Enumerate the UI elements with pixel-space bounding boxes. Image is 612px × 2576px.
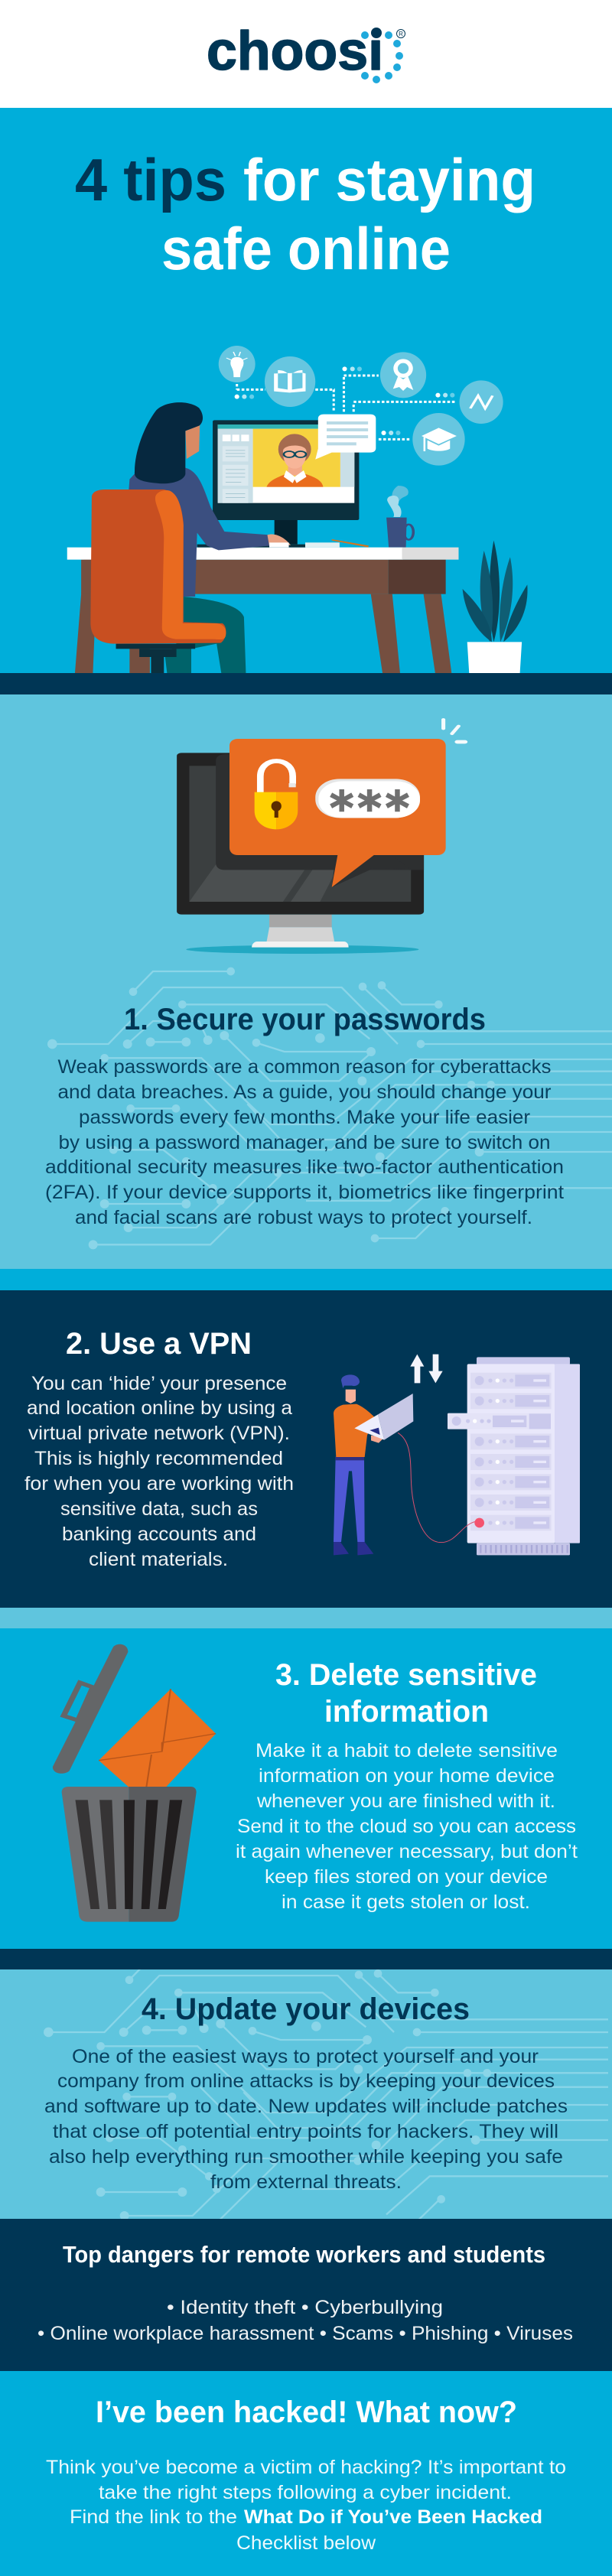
on-screen person xyxy=(266,434,323,487)
panel: hero xyxy=(0,108,612,673)
chair xyxy=(90,490,226,673)
desk xyxy=(67,548,458,673)
body text xyxy=(24,1373,294,1570)
password asterisks: *** xyxy=(330,782,413,835)
body text: that close off potential entry points for hackers. They will xyxy=(53,2121,558,2142)
divider band xyxy=(0,1949,612,1969)
body text: What Do if You’ve Been Hacked xyxy=(244,2506,542,2528)
body text: and software up to date. New updates will include patches xyxy=(44,2096,568,2117)
title: safe online xyxy=(161,215,451,282)
password field xyxy=(315,779,420,818)
body text: from external threats. xyxy=(210,2171,402,2193)
body text: and location online by using a xyxy=(27,1397,292,1419)
body text: This is highly recommended xyxy=(34,1448,283,1469)
icon bubbles with connecting dots xyxy=(219,346,503,466)
body text: sensitive data, such as xyxy=(60,1498,258,1520)
heading: 1. Secure your passwords xyxy=(124,1003,486,1036)
body text: also help everything run smoother while keeping you safe xyxy=(49,2146,563,2168)
cable and plug xyxy=(398,1433,484,1543)
person with laptop xyxy=(334,1374,413,1555)
body text: Think you’ve become a victim of hacking? It’s important to xyxy=(46,2457,566,2478)
icon: line graph xyxy=(470,395,493,408)
list of dangers: • Online workplace harassment • Scams • Phishing • Viruses xyxy=(37,2323,573,2344)
heading: 3. Delete sensitive xyxy=(275,1658,537,1692)
divider band xyxy=(0,1608,612,1628)
icon: ribbon xyxy=(393,359,413,391)
heading: Top dangers for remote workers and students xyxy=(63,2241,545,2268)
server rack xyxy=(448,1357,580,1555)
speech bubble xyxy=(315,415,376,460)
list of dangers xyxy=(37,2297,573,2344)
illustration: envelope going into trash bin xyxy=(53,1644,216,1922)
body text: take the right steps following a cyber incident. xyxy=(99,2482,512,2503)
arrows up and down xyxy=(410,1355,443,1383)
illustration: person with laptop connected to server xyxy=(334,1355,580,1555)
icon: book xyxy=(274,370,305,392)
body text: and data breaches. As a guide, you should change your xyxy=(58,1081,551,1103)
body text xyxy=(45,1056,564,1228)
panel: top dangers xyxy=(0,2219,612,2371)
body text: in case it gets stolen or lost. xyxy=(282,1891,530,1913)
monitor xyxy=(213,420,359,545)
illustration: woman on video call at desk xyxy=(67,346,528,673)
heading: 2. Use a VPN xyxy=(66,1327,252,1361)
bin xyxy=(62,1787,197,1922)
body text: Checklist below xyxy=(236,2532,376,2554)
body text: for when you are working with xyxy=(24,1473,294,1495)
body text: Find the link to the xyxy=(70,2506,237,2528)
divider band xyxy=(0,1269,612,1290)
body text: One of the easiest ways to protect yourself and your xyxy=(72,2046,539,2067)
panel: logo header xyxy=(0,0,612,108)
panel: tip 2 use a VPN xyxy=(0,1290,612,1608)
body text: virtual private network (VPN). xyxy=(28,1423,290,1444)
title: for staying xyxy=(243,146,536,213)
body text: keep files stored on your device xyxy=(265,1866,548,1888)
title xyxy=(75,146,536,282)
list of dangers: • Identity theft • Cyberbullying xyxy=(167,2297,443,2318)
body text: passwords every few months. Make your life easier xyxy=(79,1107,530,1128)
heading: information xyxy=(324,1695,489,1729)
body text: Weak passwords are a common reason for cyberattacks xyxy=(58,1056,551,1078)
body text: additional security measures like two-factor authentication xyxy=(45,1156,564,1178)
body text: (2FA). If your device supports it, biometrics like fingerprint xyxy=(45,1182,564,1203)
body text: Make it a habit to delete sensitive xyxy=(256,1740,558,1761)
body text: company from online attacks is by keeping your devices xyxy=(57,2070,555,2092)
title: 4 tips xyxy=(75,146,226,213)
body text: and facial scans are robust ways to protect yourself. xyxy=(75,1207,532,1228)
body text xyxy=(44,2046,568,2193)
heading: 4. Update your devices xyxy=(142,1992,470,2026)
body text xyxy=(46,2457,566,2554)
body text xyxy=(236,1740,578,1913)
body text: whenever you are finished with it. xyxy=(256,1791,555,1812)
logo: choosi: R xyxy=(399,31,403,37)
icon: open padlock xyxy=(255,761,298,829)
coffee mug with steam xyxy=(386,486,413,548)
body text: Send it to the cloud so you can access xyxy=(237,1816,576,1837)
ground strip xyxy=(0,673,612,694)
speech bubble with lock and password field xyxy=(230,739,446,887)
illustration: monitor with password bubble xyxy=(177,720,465,954)
heading: I’ve been hacked! What now? xyxy=(96,2395,517,2429)
envelope xyxy=(99,1689,216,1787)
heading xyxy=(275,1658,537,1729)
body text: client materials. xyxy=(89,1549,228,1570)
bin lid xyxy=(53,1644,128,1774)
logo: choosi: choosı xyxy=(207,21,383,82)
plant xyxy=(463,541,528,673)
desk items: keyboard, notepad, pencil xyxy=(197,539,369,548)
body text: You can ‘hide’ your presence xyxy=(31,1373,287,1394)
body text: information on your home device xyxy=(259,1765,555,1787)
body text: banking accounts and xyxy=(62,1524,256,1545)
icon: lightbulb xyxy=(226,352,247,377)
body text: by using a password manager, and be sure to switch on xyxy=(58,1132,551,1153)
woman xyxy=(129,402,291,673)
panel: I've been hacked xyxy=(0,2371,612,2576)
panel: tip 1 secure your passwords xyxy=(0,694,612,1269)
panel: tip 3 delete sensitive information xyxy=(0,1628,612,1949)
icon: graduation cap xyxy=(422,428,457,451)
panel: tip 4 update your devices xyxy=(0,1969,612,2219)
body text: it again whenever necessary, but don’t xyxy=(236,1841,578,1862)
